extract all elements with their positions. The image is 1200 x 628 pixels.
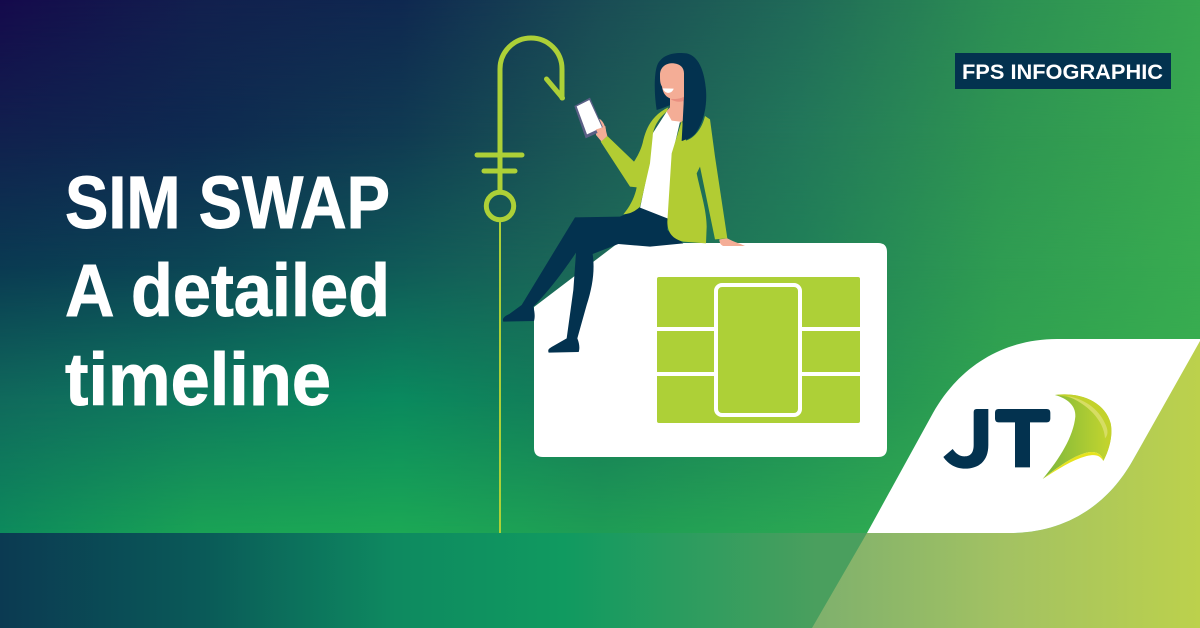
title line 2: A detailed <box>65 249 390 332</box>
bottom gradient band <box>0 533 1200 628</box>
title line 3: timeline <box>65 338 331 421</box>
logo letter J <box>943 409 988 469</box>
olive diagonal panel <box>812 339 1200 628</box>
logo sail <box>1043 394 1111 479</box>
logo: JT <box>943 394 1111 479</box>
white top <box>640 112 680 220</box>
hair front strand <box>682 67 705 141</box>
face <box>660 63 684 99</box>
hand holding phone <box>595 118 607 141</box>
logo letter T <box>995 409 1050 467</box>
jeans and shoes <box>503 208 683 353</box>
title <box>65 161 390 421</box>
white leaf logo panel <box>867 339 1200 533</box>
hand on card <box>719 238 745 246</box>
title line 1: SIM SWAP <box>65 161 390 244</box>
neck <box>666 93 685 123</box>
SIM card body <box>534 243 887 457</box>
tag: FPS infographic: FPS INFOGRAPHIC <box>962 61 1163 84</box>
hair back <box>655 53 706 141</box>
tag: FPS infographic <box>955 53 1171 89</box>
phone <box>574 98 606 138</box>
illustration: woman sitting on SIM card <box>503 53 745 353</box>
smile <box>663 88 674 93</box>
jacket left with sleeve <box>601 107 668 214</box>
icon: hook arrow line <box>477 38 562 533</box>
SIM card <box>534 243 887 457</box>
SIM chip <box>657 277 860 423</box>
jacket right panel <box>667 116 727 243</box>
neck shadow <box>671 96 684 102</box>
